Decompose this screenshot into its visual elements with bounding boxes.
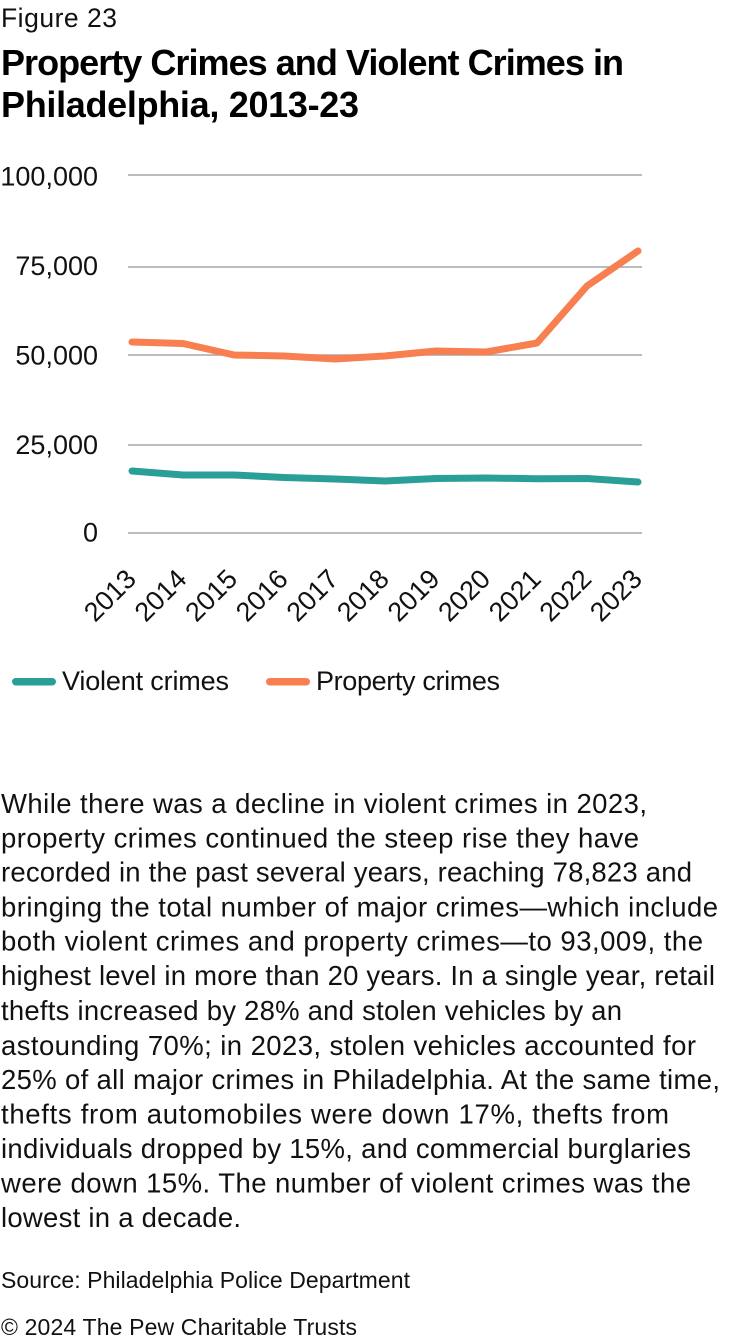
body paragraph: While there was a decline in violent crimes in 2023, bbox=[1, 788, 647, 819]
body paragraph: thefts from automobiles were down 17%, thefts from bbox=[1, 1098, 669, 1130]
body paragraph: 25% of all major crimes in Philadelphia. At the same time, bbox=[1, 1064, 720, 1095]
body paragraph: recorded in the past several years, reaching 78,823 and bbox=[1, 857, 692, 888]
x axis labels: 2016 bbox=[230, 564, 294, 627]
copyright: © 2024 The Pew Charitable Trusts bbox=[1, 1314, 357, 1340]
body paragraph: astounding 70%; in 2023, stolen vehicles accounted for bbox=[1, 1030, 696, 1061]
y axis labels: 75,000 bbox=[15, 251, 98, 281]
body paragraph: highest level in more than 20 years. In a single year, retail bbox=[1, 960, 715, 991]
y axis labels bbox=[0, 162, 98, 548]
x axis labels bbox=[78, 564, 648, 627]
body paragraph: property crimes continued the steep rise they have bbox=[1, 822, 639, 854]
source: Source: Philadelphia Police Department bbox=[1, 1267, 411, 1293]
legend: violent crimes: Violent crimes bbox=[62, 666, 229, 696]
violent crimes line bbox=[132, 471, 638, 482]
legend: property crimes: Property crimes bbox=[316, 666, 500, 696]
x axis labels: 2022 bbox=[534, 564, 597, 627]
body paragraph bbox=[0, 788, 720, 1233]
title: Philadelphia, 2013-23 bbox=[1, 84, 359, 125]
body paragraph: both violent crimes and property crimes—to 93,009, the bbox=[1, 926, 703, 957]
body paragraph: individuals dropped by 15%, and commercial burglaries bbox=[1, 1133, 691, 1164]
line chart bbox=[0, 162, 648, 627]
x axis labels: 2015 bbox=[179, 564, 243, 627]
body paragraph: lowest in a decade. bbox=[1, 1202, 241, 1233]
title: Property Crimes and Violent Crimes in bbox=[1, 42, 624, 83]
x axis labels: 2014 bbox=[129, 564, 192, 627]
body paragraph: thefts increased by 28% and stolen vehicles by an bbox=[1, 995, 622, 1026]
x axis labels: 2017 bbox=[281, 564, 344, 627]
legend bbox=[12, 666, 500, 696]
property crimes line bbox=[132, 251, 638, 359]
y axis labels: 100,000 bbox=[0, 162, 98, 192]
y axis labels: 50,000 bbox=[15, 340, 98, 370]
body paragraph: were down 15%. The number of violent crimes was the bbox=[0, 1168, 691, 1198]
x axis labels: 2021 bbox=[483, 564, 547, 627]
x axis labels: 2018 bbox=[331, 564, 395, 627]
x axis labels: 2020 bbox=[432, 564, 496, 627]
title bbox=[1, 42, 624, 125]
body paragraph: bringing the total number of major crimes—which include bbox=[1, 892, 718, 922]
y axis labels: 0 bbox=[83, 518, 98, 548]
figure label: Figure 23 bbox=[1, 3, 117, 33]
x axis labels: 2013 bbox=[78, 564, 142, 627]
x axis labels: 2019 bbox=[382, 564, 445, 627]
y axis labels: 25,000 bbox=[15, 430, 98, 460]
x axis labels: 2023 bbox=[584, 564, 648, 627]
